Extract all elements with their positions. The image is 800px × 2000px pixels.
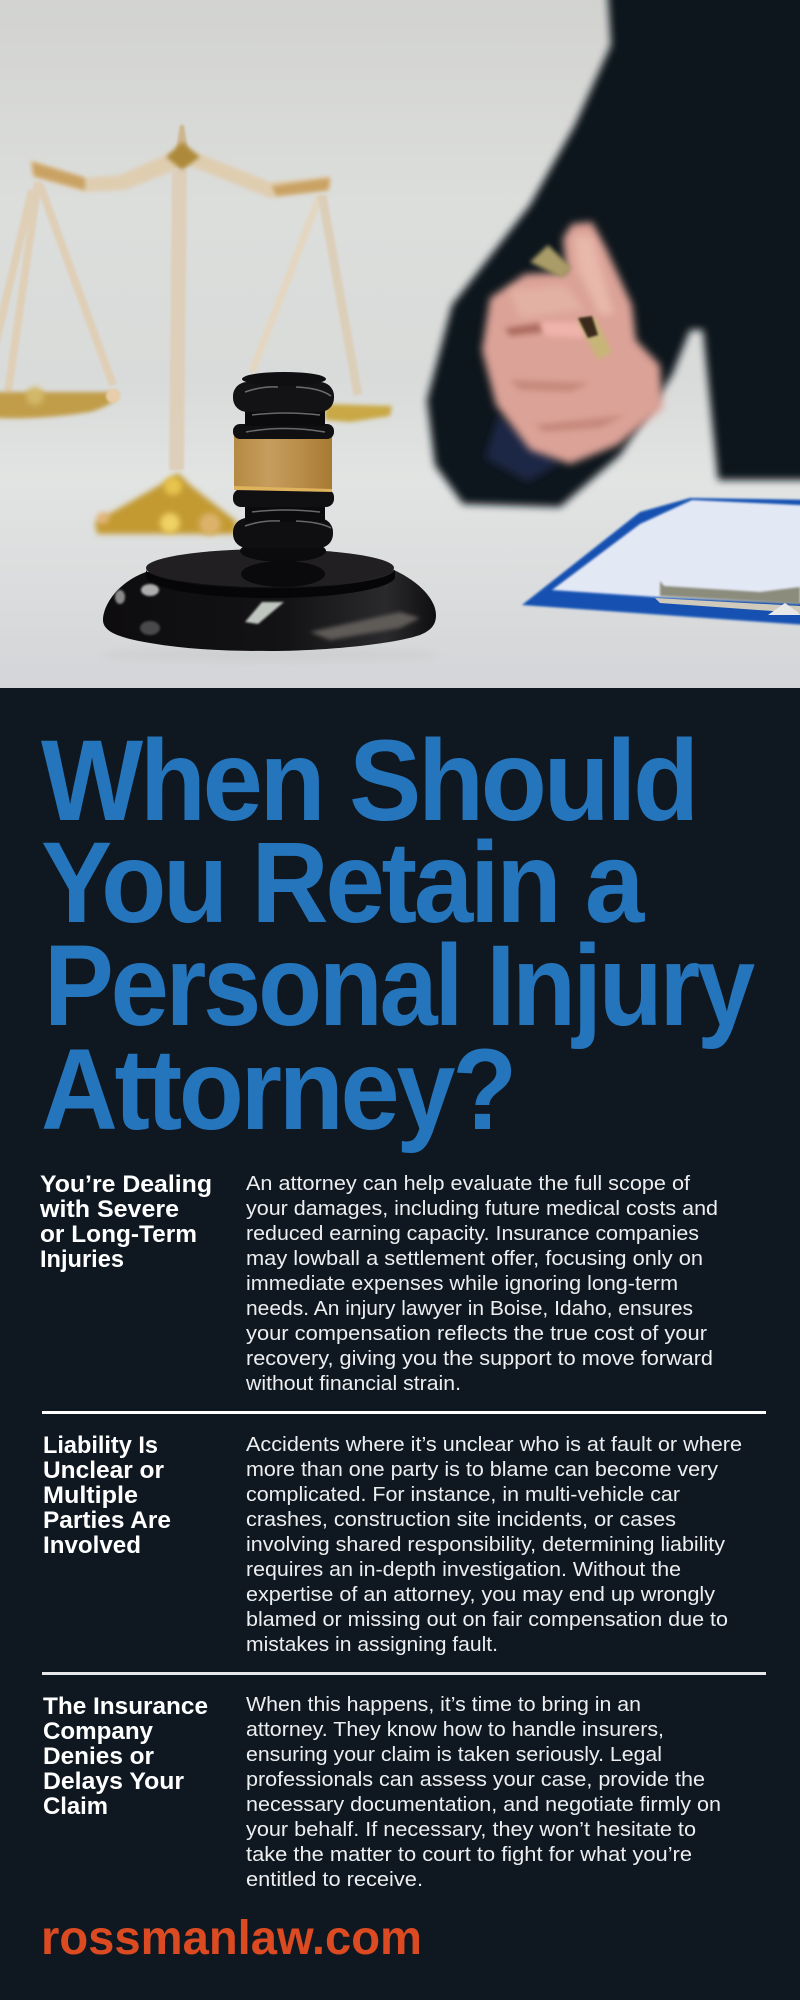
section 1: severe injuries — [39, 1171, 718, 1395]
section 2 heading: Parties Are — [43, 1507, 171, 1534]
section 2 body text — [246, 1433, 742, 1656]
section 3 body text: attorney. They know how to handle insurers, — [246, 1718, 664, 1741]
section 2 body text: more than one party is to blame can become very — [246, 1458, 719, 1481]
gavel — [233, 372, 334, 562]
section 3 heading: Company — [43, 1718, 154, 1745]
section 1 body text: reduced earning capacity. Insurance companies — [246, 1222, 699, 1245]
section 1 body text: recovery, giving you the support to move forward — [246, 1347, 713, 1370]
section 2 body text: Accidents where it’s unclear who is at fault or where — [246, 1433, 742, 1456]
section 3: insurer denies claim — [43, 1693, 721, 1891]
title: Personal Injury — [44, 922, 755, 1050]
pen — [530, 245, 612, 360]
section 3 body text: entitled to receive. — [246, 1868, 423, 1891]
section 3 heading: The Insurance — [43, 1693, 208, 1720]
photo: gavel, scales and lawyer — [0, 0, 800, 688]
section 2: unclear liability — [43, 1432, 742, 1656]
section 3 body text — [246, 1693, 721, 1891]
title: Attorney? — [41, 1026, 514, 1154]
section 3 body text: necessary documentation, and negotiate firmly on — [246, 1793, 721, 1816]
section 2 body text: expertise of an attorney, you may end up wrongly — [246, 1583, 716, 1606]
sounding block — [103, 550, 436, 651]
section 2 heading: Involved — [43, 1532, 141, 1559]
section 1 heading: You’re Dealing — [40, 1171, 212, 1198]
section 2 body text: crashes, construction site incidents, or cases — [246, 1508, 676, 1531]
section 1 heading: or Long-Term — [40, 1221, 197, 1248]
section 3 heading: Delays Your — [43, 1768, 184, 1795]
section 2 body text: requires an in-depth investigation. Without the — [246, 1558, 681, 1581]
section 3 heading: Claim — [43, 1793, 108, 1820]
section 1 body text: your damages, including future medical costs and — [246, 1197, 718, 1220]
section 1 body text: immediate expenses while ignoring long-term — [246, 1272, 678, 1295]
clipboard — [522, 498, 800, 626]
section 2 heading: Liability Is — [43, 1432, 158, 1459]
section 1 body text — [245, 1172, 718, 1395]
section 2 heading: Unclear or — [43, 1457, 164, 1484]
section 1 heading: with Severe — [39, 1196, 179, 1223]
section 3 heading — [43, 1693, 208, 1820]
title — [41, 717, 755, 1154]
section 2 body text: blamed or missing out on fair compensation due to — [246, 1608, 728, 1631]
section 1 body text: An attorney can help evaluate the full scope of — [246, 1172, 690, 1195]
lawyer jacket — [427, 0, 800, 507]
section 2 heading — [43, 1432, 171, 1559]
section 1 body text: without financial strain. — [245, 1372, 461, 1395]
section 3 body text: When this happens, it’s time to bring in an — [246, 1693, 641, 1716]
website footer: rossmanlaw.com — [41, 1912, 422, 1965]
section 3 body text: your behalf. If necessary, they won’t hesitate to — [246, 1818, 696, 1841]
balance scales — [0, 125, 392, 535]
section 2 body text: complicated. For instance, in multi-vehicle car — [246, 1483, 680, 1506]
section 1 heading — [39, 1171, 212, 1273]
sleeve cuff — [485, 415, 560, 482]
section 1 body text: may lowball a settlement offer, focusing only on — [246, 1247, 703, 1270]
title: When Should — [41, 717, 696, 845]
section 3 heading: Denies or — [43, 1743, 154, 1770]
section 1 heading: Injuries — [40, 1246, 124, 1273]
section 3 body text: professionals can assess your case, provide the — [246, 1768, 705, 1791]
section 1 body text: needs. An injury lawyer in Boise, Idaho, ensures — [246, 1297, 693, 1320]
section 2 body text: involving shared responsibility, determining liability — [246, 1533, 726, 1556]
section 1 body text: your compensation reflects the true cost of your — [246, 1322, 707, 1345]
lawyer hand — [482, 222, 663, 464]
section 3 body text: take the matter to court to fight for what you’re — [246, 1843, 692, 1866]
section 2 body text: mistakes in assigning fault. — [246, 1633, 498, 1656]
title: You Retain a — [41, 819, 645, 947]
section 3 body text: ensuring your claim is taken seriously. Legal — [246, 1743, 662, 1766]
section 2 heading: Multiple — [43, 1482, 138, 1509]
